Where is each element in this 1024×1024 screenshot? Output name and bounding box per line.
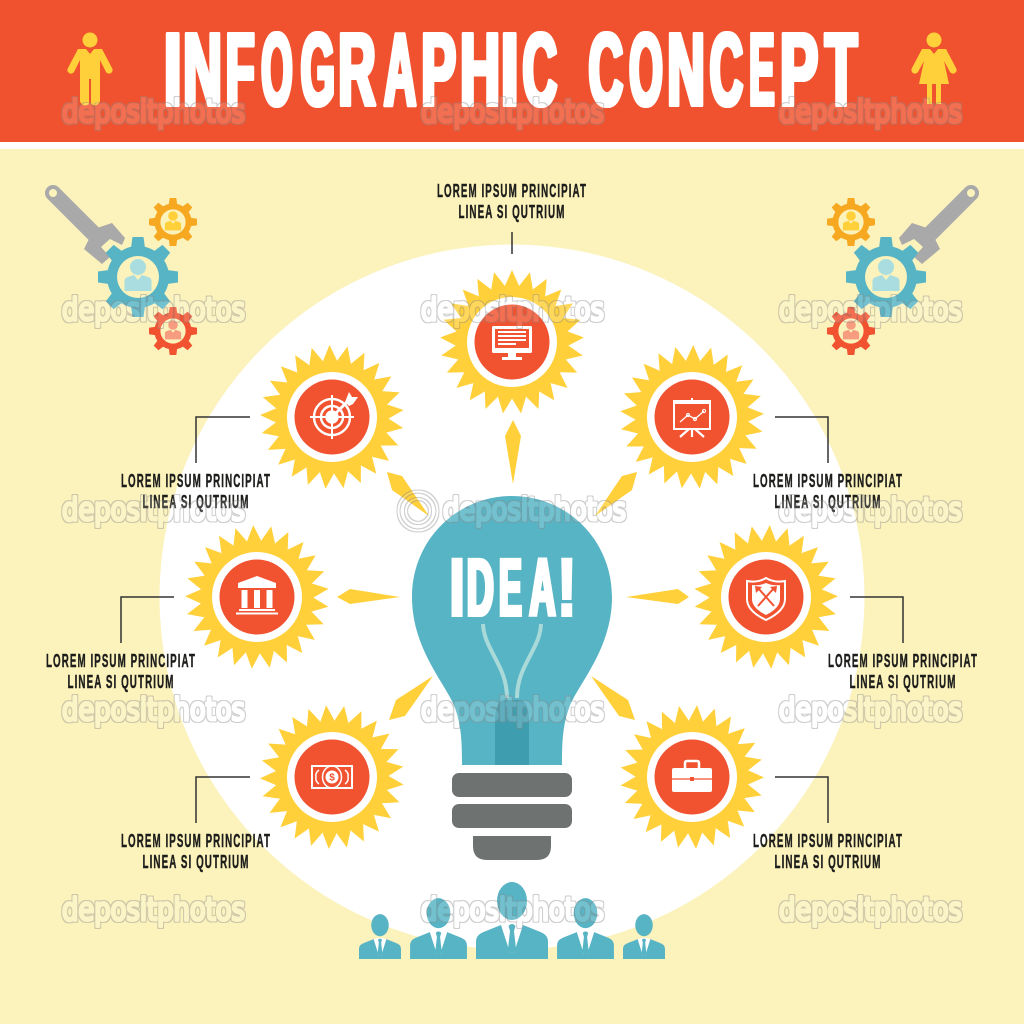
watermarks: depositphotos [779,292,962,328]
title: E [749,12,774,127]
watermarks: depositphotos [779,692,962,728]
title: G [301,12,335,127]
sunburst: shield [690,521,842,673]
title: A [384,12,416,127]
label money: LOREM IPSUM PRINCIPIAT [121,831,271,851]
label chart [753,471,903,512]
title: P [421,12,456,127]
icon: target [310,392,358,439]
label bank: LINEA SI QUTRIUM [68,672,174,692]
label chart: LOREM IPSUM PRINCIPIAT [753,471,903,491]
icon: shield [747,578,785,620]
label top [437,181,587,222]
watermarks [62,94,962,928]
connector lines [121,232,903,823]
icon: bank [236,576,278,614]
sunburst: money [254,699,410,855]
bulb text: E [499,542,522,634]
label top: LOREM IPSUM PRINCIPIAT [437,181,587,201]
watermarks: depositphotos [62,892,245,928]
label target: LOREM IPSUM PRINCIPIAT [121,471,271,491]
label money: LINEA SI QUTRIUM [142,852,250,872]
watermarks: depositphotos [421,292,604,328]
icon: banknote [311,765,353,789]
title: F [226,12,254,127]
icon: briefcase [672,761,712,792]
team of business people [359,882,665,959]
header band [0,0,1024,149]
title: N [667,12,705,127]
light bulb [412,496,612,860]
icon: man [67,32,113,105]
watermarks: depositphotos [779,94,962,130]
label target: LINEA SI QUTRIUM [142,492,250,512]
label top: LINEA SI QUTRIUM [458,202,566,222]
watermarks: depositphotos [421,892,604,928]
title: R [338,12,376,127]
sunburst: briefcase [615,700,769,854]
title: I [164,12,182,127]
title: O [629,12,663,127]
label money [121,831,271,872]
label briefcase [753,831,903,872]
sunburst: monitor [440,270,584,414]
label briefcase: LOREM IPSUM PRINCIPIAT [753,831,903,851]
watermarks: depositphotos [779,492,962,528]
label bank: LOREM IPSUM PRINCIPIAT [46,651,196,671]
bulb text: I [450,542,464,634]
title: C [589,12,623,127]
title: C [523,12,557,127]
watermarks: depositphotos [62,94,245,130]
watermarks: depositphotos [443,492,626,528]
gears and wrench left [49,189,197,355]
title: T [825,12,857,127]
icon: banknote: $ [329,772,335,784]
title: N [183,12,222,127]
title: P [780,12,818,127]
watermarks: depositphotos [421,94,604,130]
rays around the bulb [337,420,689,720]
label briefcase: LINEA SI QUTRIUM [774,852,882,872]
icon: monitor [492,326,532,360]
watermarks: depositphotos [62,692,245,728]
title: I [501,12,519,127]
label shield [828,651,978,692]
bulb text: A [530,542,556,634]
sunburst: target [257,343,407,492]
watermarks: depositphotos [421,692,604,728]
bulb text: ! [558,542,575,634]
watermarks: depositphotos [62,292,245,328]
icon: woman [911,32,957,104]
watermarks: depositphotos [62,492,245,528]
label chart: LINEA SI QUTRIUM [774,492,882,512]
sunburst: presentation board [618,344,766,491]
bulb text: D [467,542,494,634]
label target [121,471,271,512]
title: C [710,12,743,127]
sunburst: bank [181,521,333,673]
watermarks: depositphotos [779,892,962,928]
icon: presentation board [673,398,711,437]
gears and wrench right [827,189,975,355]
title: O [261,12,292,127]
title: H [460,12,500,127]
label bank [46,651,196,692]
white circle backdrop [160,244,864,950]
